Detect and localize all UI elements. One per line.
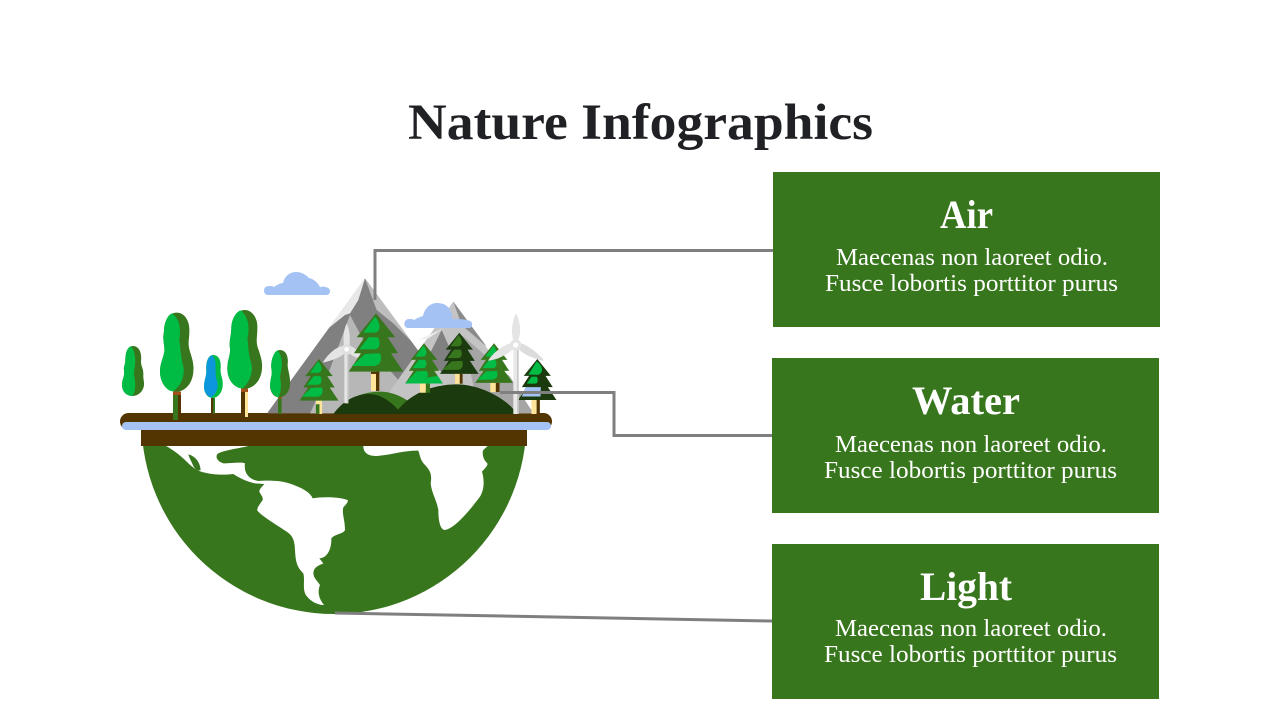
cloud left (264, 272, 330, 295)
tree 1 (122, 346, 144, 396)
panel: air (773, 172, 1160, 327)
pine 5 (475, 343, 513, 392)
tree 3 (211, 398, 215, 414)
text: air: Maecenas non laoreet odio. (836, 245, 1108, 271)
ground band (141, 428, 527, 446)
tree 4 (241, 389, 248, 413)
platform (120, 413, 552, 430)
pine 6 (518, 359, 556, 414)
text: water: Fusce lobortis porttitor purus (824, 458, 1117, 484)
wind turbine right (488, 313, 544, 414)
connector: light (335, 613, 772, 621)
heading: light: Light (920, 564, 1013, 609)
text: water: Maecenas non laoreet odio. (835, 432, 1107, 458)
tree 2 (173, 392, 181, 413)
pine 3 (405, 343, 443, 393)
cloud right (404, 303, 472, 328)
pine 4 (440, 333, 479, 384)
water strip (122, 422, 551, 430)
mountains (267, 278, 534, 413)
heading: water: Water (912, 378, 1020, 423)
text: light: Maecenas non laoreet odio. (835, 616, 1107, 642)
pines (299, 313, 556, 414)
panel: light (772, 544, 1159, 699)
illustration: globe with landscape (120, 272, 556, 614)
wind turbine left (323, 323, 365, 403)
heading: air: Air (940, 192, 993, 237)
pine 2 (349, 313, 403, 391)
panel: water (772, 358, 1159, 513)
text: light: Fusce lobortis porttitor purus (824, 642, 1117, 668)
text: air: Fusce lobortis porttitor purus (825, 271, 1118, 297)
connector: water (500, 392, 772, 436)
pine 1 (299, 359, 339, 414)
tree 5 (278, 395, 282, 414)
connector: air (375, 250, 773, 300)
left trees (122, 310, 290, 420)
title: Nature Infographics (408, 95, 873, 151)
globe (142, 422, 526, 614)
hills (333, 384, 517, 414)
